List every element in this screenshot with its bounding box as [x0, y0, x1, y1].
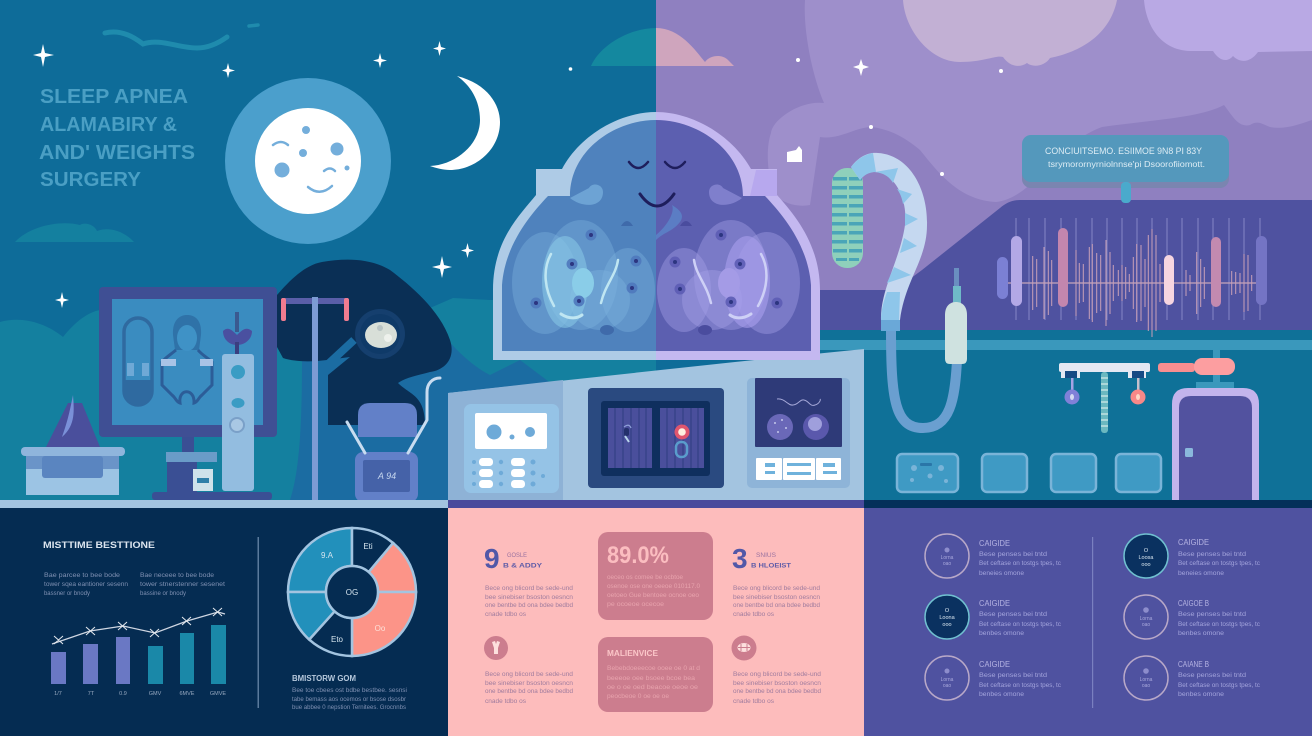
bar chart: 7T — [88, 691, 95, 697]
stat 3: B HLOEIST — [751, 562, 791, 570]
item 1 — [925, 534, 1062, 578]
panel: key figures pink — [448, 508, 864, 736]
item 3: benbes omone — [979, 691, 1024, 698]
item 6: Bet ceftase on tostgs tpes, tc — [1178, 682, 1261, 689]
console readout screen — [747, 378, 850, 488]
right lung lobes — [657, 185, 800, 334]
text block: bee sinebiser bsoston oesncn — [485, 680, 573, 687]
item 3 — [925, 656, 1062, 700]
text block right: bassine or bnody — [140, 590, 187, 597]
bottle — [945, 268, 967, 364]
text block right — [140, 572, 225, 597]
item 3: CAIGIDE — [979, 660, 1010, 669]
item 6: benbes omone — [1178, 691, 1224, 698]
IV stand — [281, 297, 349, 500]
card: maliervice: beeeoe oee bsoee bcoe bea — [607, 675, 695, 682]
panel: risk circles indigo — [864, 508, 1312, 736]
text block: bee sinebiser bsoston oesncn — [733, 680, 821, 687]
item 5: Lorna — [1140, 616, 1153, 622]
text block right: tower stnerstenner sesenet — [140, 581, 225, 588]
cloud: lilac — [1144, 0, 1312, 61]
console scan screen — [588, 388, 724, 488]
text block left — [44, 572, 128, 597]
text block left: tower sqea eantioner sesenn — [44, 581, 128, 588]
heading: MISTTIME BESTTIONE — [43, 540, 155, 550]
item 5: Bese penses bei tntd — [1178, 611, 1246, 618]
card: maliervice: Bebebdoeeecoe ooee oe 0 at d — [607, 665, 700, 672]
console keypad — [464, 404, 559, 493]
item 4: beneies omone — [1178, 570, 1224, 577]
sleeping brain dome — [493, 112, 820, 360]
donut chart: Eto — [331, 635, 344, 644]
icon: brain — [732, 636, 756, 660]
item 3: Bet ceftase on tostgs tpes, tc — [979, 682, 1062, 689]
item 1: oao — [943, 561, 951, 567]
title: SLEEP APNEA — [40, 86, 188, 108]
card: 89.0%: osenoe ose one oeeoe 010117.0 — [607, 583, 700, 590]
text block: one bentbe bd ona bdee bedbd — [485, 602, 573, 609]
alveoli cells — [530, 230, 782, 308]
divider — [258, 537, 259, 708]
card: 89.0%: oetoeo Gue bentoee ocnoe oeo — [607, 592, 699, 599]
card: maliervice: peocbeoe 0 oe oe oe — [607, 693, 669, 700]
card: maliervice: oe o oe oed beacoe oeoe oe — [607, 684, 698, 691]
title: ALAMABIRY & — [40, 114, 177, 136]
star and dots — [569, 58, 1003, 176]
item 1: Bese penses bei tntd — [979, 551, 1047, 558]
item 2: ooo — [942, 622, 952, 628]
storage box with leaf — [21, 395, 125, 495]
dark lamp silhouette — [277, 260, 452, 425]
text block: cnade tdbo os — [485, 698, 527, 705]
donut caption — [292, 674, 407, 711]
item 5: CAIGOE B — [1178, 599, 1209, 608]
text block — [485, 585, 573, 618]
indigo waveform panel — [819, 200, 1312, 332]
panel: right dusk sky scene — [569, 0, 1312, 505]
card: maliervice — [598, 637, 713, 712]
stat 9: GOSLE — [507, 553, 527, 559]
bar chart: GMVE — [210, 691, 226, 697]
donut caption: bue abbee 0 nepstion Ternitees. Grocnnbs — [292, 704, 407, 711]
clamp with screw — [1059, 363, 1195, 433]
item 5 — [1124, 595, 1261, 639]
left lung lobes — [512, 185, 655, 334]
card: maliervice: MALIENVICE — [607, 648, 658, 658]
title — [39, 86, 195, 191]
cloud: pink — [903, 0, 1117, 66]
stat 3 — [732, 543, 791, 574]
bar chart: 1/7 — [54, 691, 62, 697]
text block — [733, 671, 821, 705]
equipment tower — [222, 312, 254, 491]
donut chart: 9.A — [321, 551, 334, 560]
control console — [448, 349, 864, 500]
swoosh cloud — [105, 25, 258, 48]
callout: tsrymorornyrniolnnse'pi Dsoorofiiomott. — [1048, 160, 1205, 169]
item 4 — [1124, 534, 1261, 578]
control squares — [897, 454, 1161, 492]
item 6: CAIANE B — [1178, 660, 1209, 669]
striped microphone capsule — [832, 168, 863, 268]
text block left: Bae parcee to bee bode — [44, 572, 120, 579]
lung capsule diagram — [124, 318, 152, 405]
item 1: Lorna — [941, 555, 954, 561]
panel: statistics navy — [0, 508, 448, 736]
item 5: Bet ceftase on tostgs tpes, tc — [1178, 621, 1261, 628]
bar chart — [51, 608, 226, 697]
donut chart: Eti — [363, 542, 373, 551]
item 2: Bese penses bei tntd — [979, 611, 1047, 618]
item 6 — [1124, 656, 1261, 700]
text block: Bece ong blicord be sede-und — [485, 671, 573, 678]
stat 9 — [484, 543, 543, 574]
text block: Bece ong blicord be sede-und — [733, 585, 820, 592]
item 4: CAIGIDE — [1178, 538, 1209, 547]
text block: one bentbe bd ona bdee bedbd — [733, 602, 820, 609]
waveform chart — [997, 218, 1267, 337]
text block: one bentbe bd ona bdee bedbd — [733, 688, 821, 695]
item 5: oao — [1142, 622, 1150, 628]
text block right: Bae neceee to bee bode — [140, 572, 214, 579]
CPAP hose — [851, 153, 957, 428]
text block — [485, 671, 573, 705]
nose and chin bumps — [600, 221, 712, 335]
text block: cnade tdbo os — [733, 698, 775, 705]
cloud: centre top pink — [656, 28, 734, 66]
item 2: Loona — [939, 615, 956, 621]
bottom strip — [0, 500, 1312, 508]
donut caption: Bee toe cbees ost bdbe bestbee. sesnsi — [292, 687, 407, 694]
item 2: O — [945, 608, 950, 614]
item 3: oao — [943, 683, 951, 689]
text block: bee sinebiser bsoston oesncn — [733, 594, 820, 601]
callout: CONCIUITSEMO. ESIIMOE 9N8 PI 83Y — [1045, 146, 1202, 156]
small cloud — [15, 223, 134, 242]
donut caption: BMISTORW GOM — [292, 674, 356, 683]
item 1: Bet ceftase on tostgs tpes, tc — [979, 560, 1062, 567]
card: 89.0%: pe ocoeoe ocecoe — [607, 601, 664, 608]
bar chart: GMV — [149, 691, 162, 697]
item 6: oao — [1142, 683, 1150, 689]
callout — [1022, 135, 1229, 203]
icon: full moon — [225, 78, 391, 244]
donut chart — [288, 528, 416, 656]
text block: bee sinebiser bsoston oesncn — [485, 594, 573, 601]
card: 89.0%: oeceo os comee be ocbtoe — [607, 574, 683, 581]
item 4: Loosa — [1138, 555, 1154, 561]
item 3: Lorna — [941, 677, 954, 683]
item 2 — [925, 595, 1062, 639]
sleeping face — [629, 162, 685, 206]
text block: Bece ong blicord be sede-und — [485, 585, 573, 592]
item 4: ooo — [1141, 562, 1151, 568]
donut chart: OG — [346, 588, 358, 597]
card: 89.0%: 89.0% — [607, 542, 669, 569]
icon: crescent moon — [430, 76, 500, 170]
stat 9: 9 — [484, 543, 500, 574]
bar chart: 0.9 — [119, 691, 127, 697]
item 6: Lorna — [1140, 677, 1153, 683]
item 2: benbes omone — [979, 630, 1024, 637]
donut chart: Oo — [375, 624, 386, 633]
text block — [733, 585, 820, 618]
text block: cnade tdbo os — [733, 611, 775, 618]
item 2: Bet ceftase on tostgs tpes, tc — [979, 621, 1062, 628]
CPAP machine: A 94 — [377, 471, 396, 481]
bar chart: 6MVE — [180, 691, 195, 697]
title: AND' WEIGHTS — [39, 142, 195, 164]
item 1: beneies omone — [979, 570, 1024, 577]
lower teal band — [819, 330, 1312, 505]
panel: left night sky scene — [0, 0, 656, 510]
stat 3: 3 — [732, 543, 748, 574]
card: 89.0% — [598, 532, 713, 620]
donut caption: tabe bemass aos ocemos or bsose dsosbr — [292, 696, 407, 703]
monitor — [99, 287, 277, 500]
CPAP machine — [347, 378, 440, 502]
item 6: Bese penses bei tntd — [1178, 672, 1246, 679]
door — [1172, 350, 1259, 500]
text block: one bentbe bd ona bdee bedbd — [485, 688, 573, 695]
stat 9: B & ADDY — [503, 562, 543, 570]
text block: Bece ong blicord be sede-und — [733, 671, 821, 678]
stars — [33, 41, 474, 308]
stat 3: SNIUS — [756, 553, 776, 559]
item 4: Bet ceftase on tostgs tpes, tc — [1178, 560, 1261, 567]
cloud: centre top teal — [591, 28, 656, 66]
item 4: O — [1144, 548, 1149, 554]
item 2: CAIGIDE — [979, 599, 1010, 608]
divider — [1092, 537, 1093, 708]
item 1: CAIGIDE — [979, 539, 1010, 548]
icons in first square — [910, 463, 948, 483]
item 3: Bese penses bei tntd — [979, 672, 1047, 679]
patient figure — [161, 315, 213, 403]
title: SURGERY — [40, 169, 142, 191]
item 4: Bese penses bei tntd — [1178, 551, 1246, 558]
icon: airway — [484, 636, 508, 660]
item 5: benbes omone — [1178, 630, 1224, 637]
text block left: bassner or bnody — [44, 590, 91, 597]
text block: cnade tdbo os — [485, 611, 527, 618]
